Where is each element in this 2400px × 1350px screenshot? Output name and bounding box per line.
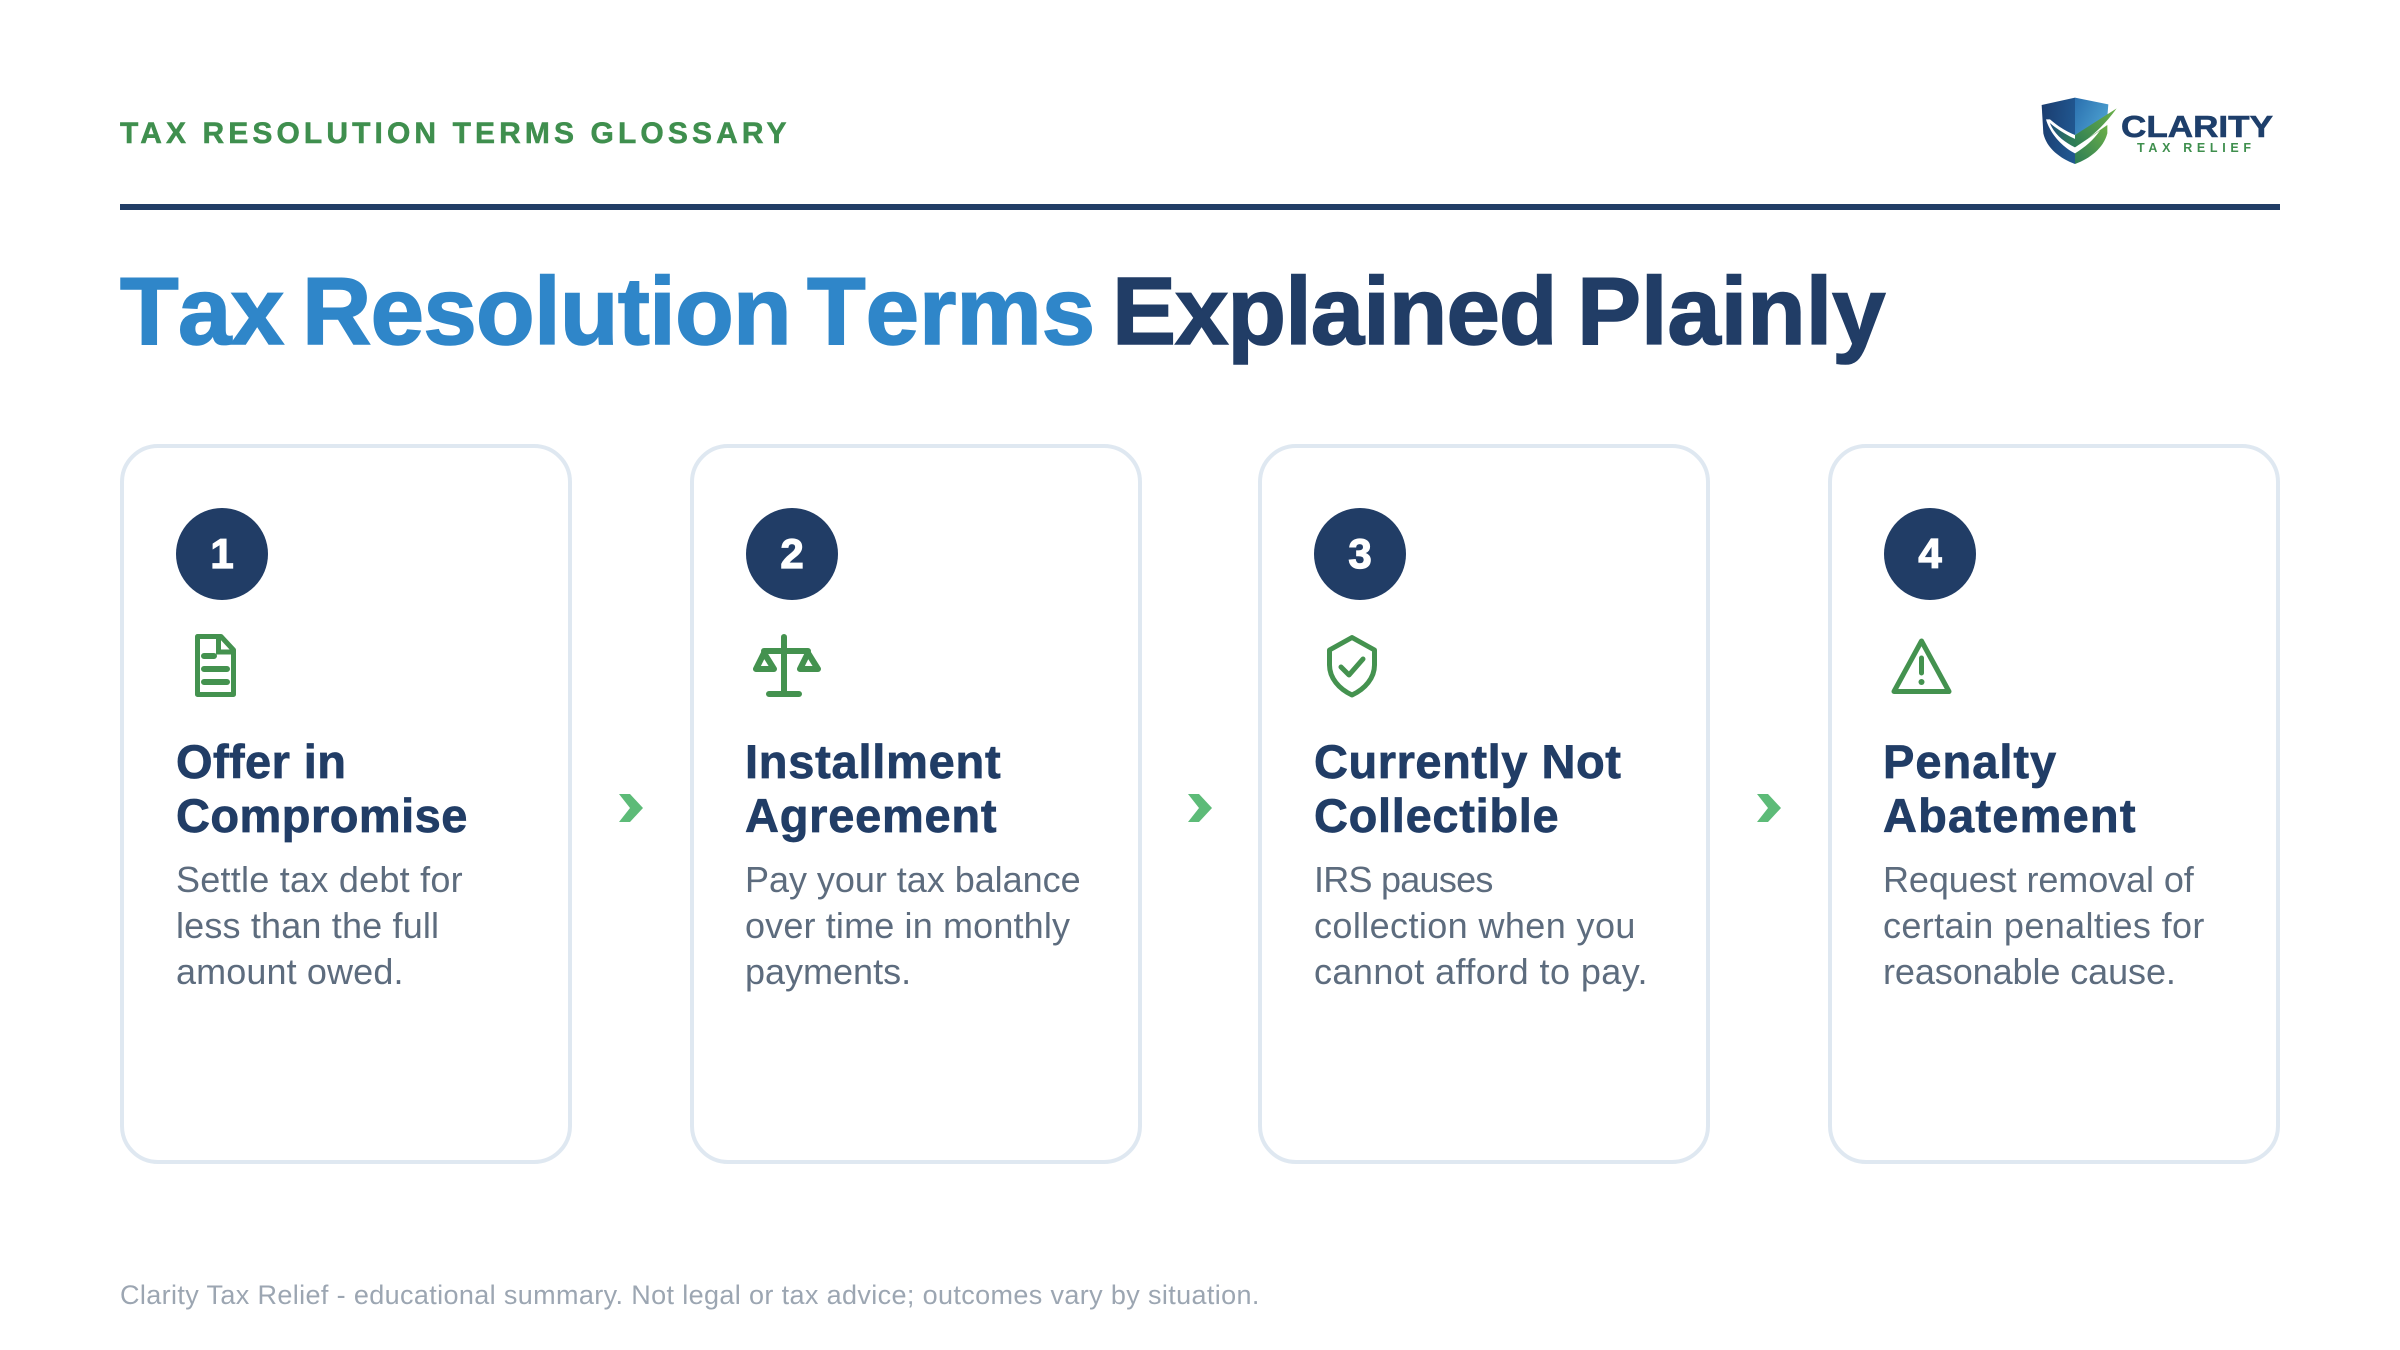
title	[120, 258, 1886, 365]
title: Plainly	[1577, 258, 1885, 365]
step number 2	[746, 508, 838, 600]
card 1: Offer in Compromise	[120, 444, 572, 1164]
card 1 description: Settle tax debt for	[176, 859, 463, 900]
header rule	[120, 204, 2280, 210]
footer disclaimer: Clarity Tax Relief - educational summary. Not legal or tax advice; outcomes vary by situation.	[120, 1280, 1260, 1310]
title: Resolution	[302, 258, 791, 365]
card 2 heading	[745, 735, 1001, 842]
title: Tax	[120, 258, 283, 365]
card 1 description: amount owed.	[176, 951, 404, 992]
card 4: Penalty Abatement	[1828, 444, 2280, 1164]
card 3 description: IRS pauses	[1314, 859, 1493, 900]
card 4 description: Request removal of	[1883, 859, 2194, 900]
step number 2: 2	[780, 530, 804, 577]
card 4 heading	[1883, 735, 2137, 842]
title: Explained	[1112, 258, 1556, 365]
card 4 description: certain penalties for	[1883, 905, 2205, 946]
card 3 description: collection when you	[1314, 905, 1636, 946]
eyebrow heading: TAX RESOLUTION TERMS GLOSSARY	[120, 117, 791, 150]
step number 3	[1314, 508, 1406, 600]
card outline	[1258, 444, 1710, 1164]
card 1 heading	[176, 735, 468, 842]
step number 3: 3	[1348, 530, 1372, 577]
card outline	[1828, 444, 2280, 1164]
card 4 description: reasonable cause.	[1883, 951, 2176, 992]
arrow 1	[619, 794, 643, 822]
card 4 heading: Abatement	[1883, 789, 2137, 842]
card 2 description: Pay your tax balance	[745, 859, 1081, 900]
card 3: Currently Not Collectible	[1258, 444, 1710, 1164]
card 2 heading: Installment	[745, 735, 1001, 788]
card outline	[120, 444, 572, 1164]
icon: balance scale	[753, 634, 821, 697]
card 3 description	[1314, 859, 1648, 992]
logo: Clarity Tax Relief: TAX RELIEF	[2137, 141, 2251, 155]
card 3 description: cannot afford to pay.	[1314, 951, 1648, 992]
step number 1: 1	[210, 530, 234, 577]
card 3 heading: Collectible	[1314, 789, 1559, 842]
card 2 description	[745, 859, 1081, 992]
icon: shield check	[1327, 635, 1377, 698]
card 1 description	[176, 859, 463, 992]
step number 4	[1884, 508, 1976, 600]
icon: warning triangle	[1892, 638, 1952, 694]
step number 1	[176, 508, 268, 600]
card 3 heading: Currently Not	[1314, 735, 1621, 788]
logo: Clarity Tax Relief: CLARITY	[2121, 109, 2273, 144]
card 2 description: payments.	[745, 951, 911, 992]
card 1 heading: Offer in	[176, 735, 346, 788]
card 3 heading	[1314, 735, 1621, 842]
card 2: Installment Agreement	[690, 444, 1142, 1164]
step number 4: 4	[1918, 530, 1942, 577]
card outline	[690, 444, 1142, 1164]
arrow 3	[1757, 794, 1781, 822]
card 1 description: less than the full	[176, 905, 439, 946]
card 2 heading: Agreement	[745, 789, 997, 842]
arrow 2	[1188, 794, 1212, 822]
logo: Clarity Tax Relief	[2042, 98, 2273, 164]
card 4 heading: Penalty	[1883, 735, 2057, 788]
card 2 description: over time in monthly	[745, 905, 1070, 946]
card 4 description	[1883, 859, 2205, 992]
card 1 heading: Compromise	[176, 789, 468, 842]
icon: document	[195, 634, 236, 697]
title: Terms	[807, 258, 1095, 365]
